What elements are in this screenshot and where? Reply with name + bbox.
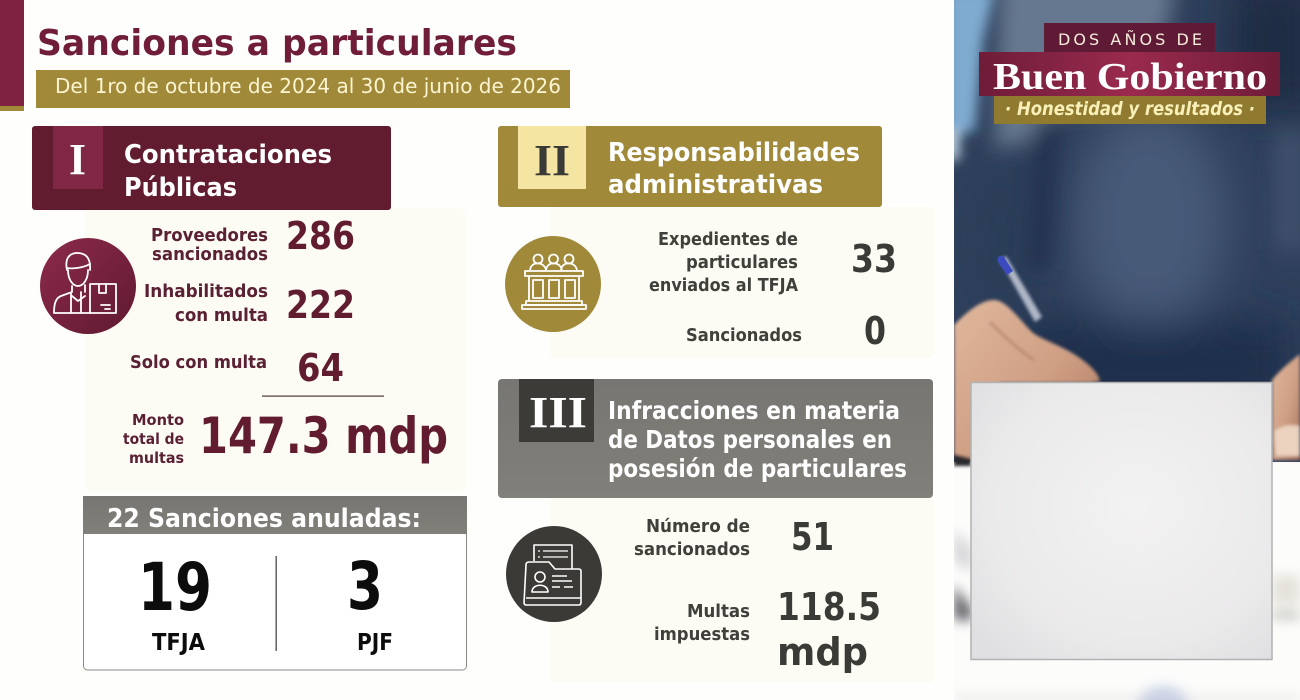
section header I: Públicas [124,173,237,203]
stat: monto total de multas: 147.3 mdp [199,407,448,465]
pen [998,256,1042,322]
stat: proveedores sancionados: 286 [286,214,355,258]
stat: número de sancionados: sancionados [634,539,750,560]
stat: TFJA: 19 [138,549,212,626]
section header II [498,126,882,207]
stat: inhabilitados con multa: con multa [175,305,268,326]
logo: dos años de buen gobierno: Buen Gobierno [993,56,1267,98]
section header III [498,379,933,498]
stat: multas impuestas: impuestas [654,624,750,645]
section header I [32,126,391,210]
stat: monto total de multas: total de [123,430,184,448]
date range banner [36,70,570,108]
date range banner: Del 1ro de octubre de 2024 al 30 de junio de 2026 [55,74,561,98]
logo: dos años de buen gobierno [979,23,1280,124]
section header III: posesión de particulares [608,454,907,483]
stat: expedientes enviados al TFJA: particulares [686,252,798,273]
icon: supplier with box [40,238,136,334]
stat: expedientes enviados al TFJA: Expedientes de [658,229,798,250]
stat: multas impuestas: 118.5 [777,585,881,629]
stat: multas impuestas: Multas [687,601,750,622]
stat: monto total de multas: multas [129,449,184,467]
stat: expedientes enviados al TFJA: 33 [851,237,897,281]
stat: inhabilitados con multa: Inhabilitados [144,281,268,302]
section header II: II [534,136,570,185]
section header III: de Datos personales en [608,425,892,454]
stat: TFJA [138,549,212,656]
stat: número de sancionados: Número de [646,516,750,537]
stat: inhabilitados con multa: 222 [286,283,355,327]
section header III: III [529,388,587,437]
stat: multas impuestas: mdp [777,630,868,674]
title: Sanciones a particulares [37,23,517,64]
panel: responsabilidades administrativas [498,126,935,358]
panel: sanciones anuladas [83,496,467,670]
accent bar [0,0,24,111]
stat: número de sancionados: 51 [791,515,834,559]
stat: sancionados [686,309,886,353]
stat: sancionados: Sancionados [686,325,802,346]
logo: dos años de buen gobierno: DOS AÑOS DE [1058,30,1202,49]
stat: proveedores sancionados: sancionados [152,244,268,265]
video placeholder [971,382,1272,660]
stat: solo con multa: 64 [297,346,344,390]
stat: proveedores sancionados [151,214,355,265]
panel: contrataciones públicas [32,126,467,670]
hands [954,300,1300,466]
section header III: Infracciones en materia [608,396,900,425]
stat: proveedores sancionados: Proveedores [151,225,268,246]
stat: inhabilitados con multa [144,281,355,327]
logo: dos años de buen gobierno: · Honestidad y resultados · [1005,98,1255,120]
stat: sancionados: 0 [864,309,886,353]
stat: solo con multa: Solo con multa [130,352,267,373]
stat: expedientes enviados al TFJA: enviados al TFJA [649,275,798,296]
stat: número de sancionados [634,515,834,560]
section header II: Responsabilidades [608,138,860,168]
section header I: Contrataciones [124,140,332,170]
stat: PJF: 3 [347,548,383,625]
stat: expedientes enviados al TFJA [649,229,897,296]
stat: solo con multa [130,346,344,390]
panel: sanciones anuladas: 22 Sanciones anuladas: [107,504,421,534]
photo: person signing a document [945,0,1300,700]
stat: TFJA: TFJA [152,630,205,656]
section header II: administrativas [608,170,823,200]
stat: monto total de multas [123,407,448,467]
stat: monto total de multas: Monto [132,411,184,429]
stat: PJF: PJF [357,630,393,656]
section header I: I [69,135,86,184]
icon: tribunal [505,236,601,332]
stat: multas impuestas [654,585,881,674]
icon: personal data folder [506,526,602,622]
panel: datos personales [498,379,935,682]
